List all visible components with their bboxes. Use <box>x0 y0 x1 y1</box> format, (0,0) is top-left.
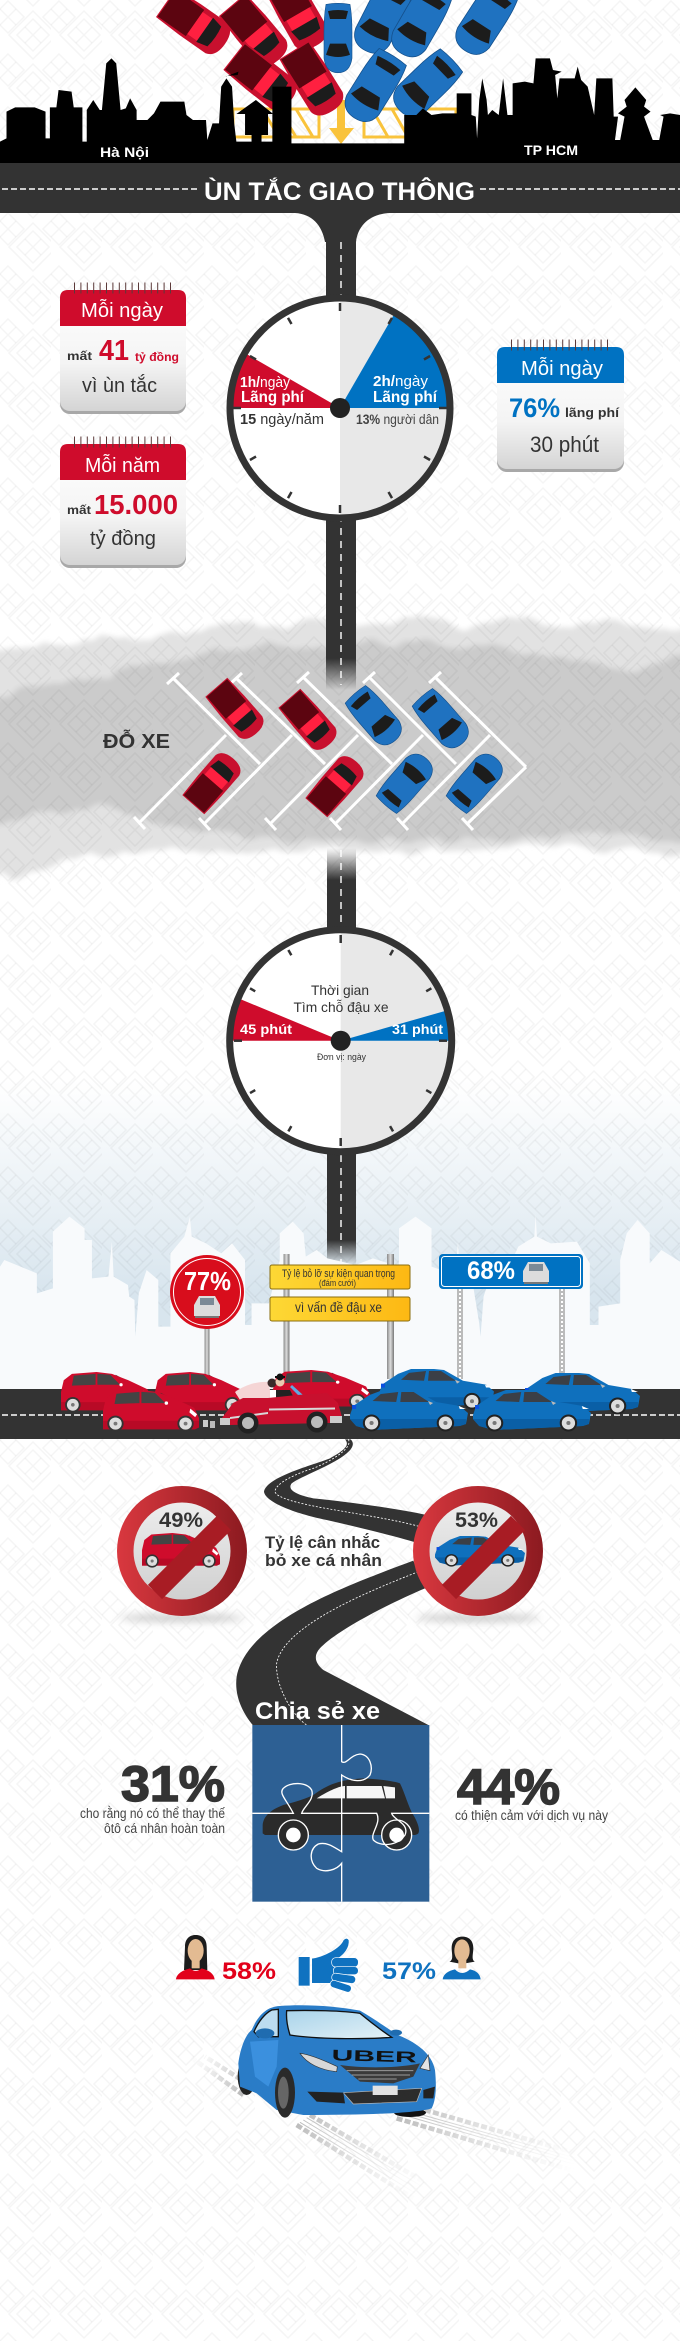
puzzle cut lines <box>252 1725 429 1902</box>
wedding car <box>203 1374 342 1434</box>
sign: red 77% <box>170 1255 244 1380</box>
tyre tracks <box>190 2057 577 2198</box>
calendar: every year 15000 billion: mất <box>67 503 91 517</box>
icon: lantern <box>236 100 273 143</box>
red cars <box>155 0 348 121</box>
sign: yellow missed events: (đám cưới) <box>319 1278 356 1288</box>
no-car sign: 49% <box>117 1486 247 1622</box>
traffic cars <box>61 1369 640 1434</box>
calendar: 76% waste 30 minutes: lãng phí <box>565 405 619 420</box>
heading: car sharing: Chia sẻ xe <box>255 1698 380 1725</box>
sign: yellow missed events: Tỷ lệ bỏ lỡ sự kiện quan trọng <box>282 1268 395 1280</box>
road band: title <box>0 163 680 242</box>
calendar: every day 41 billion: 41 <box>99 335 129 367</box>
stat: 44% <box>455 1759 608 1823</box>
calendar: every day 41 billion: vì ùn tắc <box>82 374 157 397</box>
sign: blue 68%: 68% <box>467 1257 515 1285</box>
icon: down arrow <box>329 100 354 144</box>
text: consider giving up own car: Tỷ lệ cân nhắc <box>265 1533 380 1552</box>
label: Ha Noi: Hà Nội <box>100 144 149 160</box>
puzzle car panel <box>252 1725 429 1902</box>
calendar: 76% waste 30 minutes <box>497 345 624 472</box>
icon: thumbs up <box>298 1938 358 1993</box>
calendar: 76% waste 30 minutes: 76% <box>509 393 560 423</box>
calendar: 76% waste 30 minutes: 30 phút <box>530 432 599 457</box>
no-car sign: 53% <box>413 1486 543 1622</box>
parking section <box>103 672 526 830</box>
city silhouette <box>0 1215 680 1393</box>
stat: 31%: ôtô cá nhân hoàn toàn <box>104 1821 225 1836</box>
clock: time wasted: Lãng phí <box>241 389 305 406</box>
grey smoke band <box>0 623 680 880</box>
stat: 31%: 31% <box>121 1756 225 1812</box>
clock: time wasted: Lãng phí <box>373 389 438 406</box>
clock title: Thời gian <box>311 982 369 998</box>
parking markings <box>233 109 456 137</box>
stat: 31%: cho rằng nó có thể thay thế <box>80 1806 225 1821</box>
uber lettering: UBER <box>331 2047 417 2066</box>
no-car sign: 53%: 53% <box>455 1509 498 1532</box>
blue value: 31 phút <box>392 1021 443 1037</box>
sign: yellow missed events <box>270 1254 410 1379</box>
sign: red 77%: 77% <box>184 1266 231 1296</box>
calendar: every day 41 billion: mất <box>67 349 92 363</box>
unit note: Đơn vị: ngày <box>317 1052 366 1062</box>
calendar: every year 15000 billion <box>60 442 186 568</box>
blue cars <box>324 0 521 128</box>
stat: 44%: 44% <box>457 1759 560 1815</box>
text: consider giving up own car: bỏ xe cá nhân <box>265 1551 382 1570</box>
sign: yellow missed events: vì vấn đề đậu xe <box>295 1299 382 1315</box>
calendar: every year 15000 billion: tỷ đồng <box>90 528 156 550</box>
parked cars <box>181 677 508 818</box>
value: 58%: 58% <box>222 1958 276 1985</box>
red wedge text: 1h/ngày <box>240 374 290 391</box>
pale blue sky gradient <box>0 1080 680 1345</box>
stat: 44%: có thiện cảm với dịch vụ này <box>455 1808 608 1823</box>
calendar: 76% waste 30 minutes: Mỗi ngày <box>521 357 603 380</box>
calendar: every year 15000 billion: Mỗi năm <box>85 454 160 477</box>
clock: parking search time: Tìm chỗ đậu xe <box>294 999 389 1015</box>
text: consider giving up own car <box>265 1533 382 1570</box>
clock: parking search time <box>230 930 452 1152</box>
calendar: every day 41 billion: Mỗi ngày <box>81 299 163 322</box>
value: 57%: 57% <box>382 1958 436 1985</box>
clock caption right: 13% người dân <box>356 411 439 427</box>
calendar: every year 15000 billion: 15.000 <box>94 489 178 520</box>
stat: 31% <box>80 1756 225 1836</box>
skyline silhouettes <box>0 58 680 167</box>
parking lines <box>134 672 526 830</box>
clock: time wasted <box>230 298 450 518</box>
no-car sign: 49%: 49% <box>159 1509 203 1532</box>
icon: woman red <box>176 1935 215 1979</box>
winding road <box>236 1439 428 1725</box>
icon: woman blue <box>443 1937 481 1979</box>
title: ÙN TẮC GIAO THÔNG <box>204 176 475 206</box>
sign: blue 68% <box>439 1254 583 1379</box>
traffic road band <box>0 1389 680 1439</box>
vertical road <box>326 213 356 1265</box>
blue wedge text: 2h/ngày <box>373 373 429 390</box>
label: TP HCM: TP HCM <box>524 142 578 158</box>
uber car with tyre tracks <box>190 2005 577 2198</box>
hero: cars converging on parking <box>0 0 680 167</box>
red value: 45 phút <box>240 1021 292 1037</box>
clock caption left: 15 ngày/năm <box>240 411 324 428</box>
calendar: every day 41 billion: tỷ đồng <box>135 350 179 364</box>
heading: parking: ĐỖ XE <box>103 729 170 753</box>
calendar: every day 41 billion <box>60 288 186 414</box>
icon: car <box>263 1778 419 1850</box>
